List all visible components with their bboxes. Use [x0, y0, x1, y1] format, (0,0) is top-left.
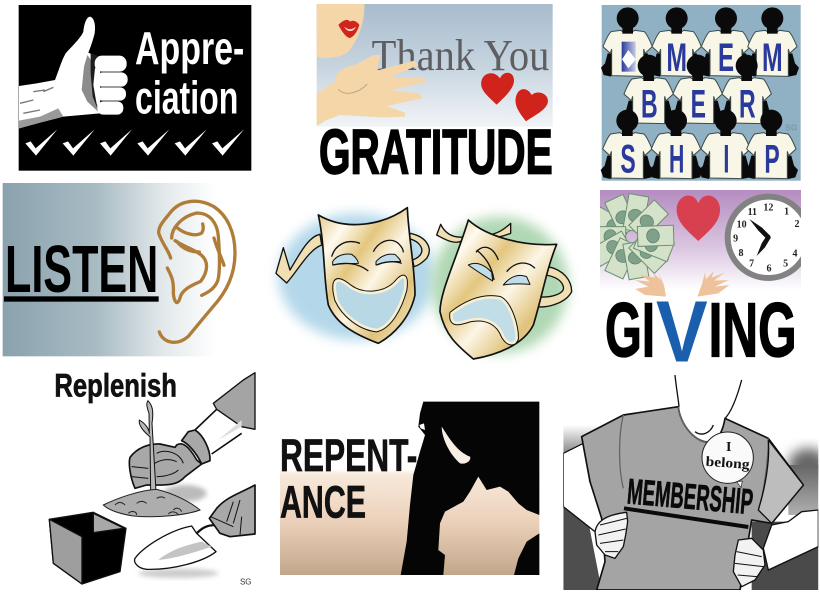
- icon: clock: 10: [737, 219, 747, 230]
- icon: clock: 2: [794, 219, 799, 230]
- icon: clock: 8: [738, 248, 743, 259]
- icon: face with lips: [317, 4, 364, 58]
- icon: left hand on hip: [595, 512, 628, 558]
- icon: clock: 7: [749, 259, 754, 270]
- underline: [4, 296, 159, 302]
- icon: six check marks: [25, 129, 244, 156]
- heading: GRATITUDE: GRATITUDE: [319, 117, 553, 187]
- background shading: [563, 405, 820, 590]
- icon: ear: [159, 201, 235, 342]
- panel: Repentance: [280, 402, 539, 575]
- badge: I belong: [702, 432, 753, 488]
- heading: Replenish: Replenish: [54, 368, 177, 404]
- bottom row of people: S: [620, 137, 636, 181]
- heading: ciation: ciation: [135, 71, 238, 123]
- middle row of people: [622, 55, 773, 127]
- icon: thumbs up hand: [19, 17, 128, 128]
- icon: gloved hand planting a seedling: [129, 373, 255, 502]
- panel: Gratitude: [317, 4, 553, 187]
- icon: mound of soil: [103, 489, 200, 517]
- icon: right hand on hip: [733, 538, 765, 587]
- heading: ANCE: ANCE: [280, 477, 366, 528]
- text: SG signature: SG: [785, 123, 798, 133]
- top row of people: [601, 7, 799, 80]
- background glow: [278, 213, 568, 353]
- icon: trowel with gloved hand: [135, 485, 255, 578]
- heading: REPENT-: REPENT-: [280, 430, 417, 481]
- icon: clock: 12: [763, 202, 773, 213]
- icon: wheel of money: [600, 193, 675, 280]
- icon: clock: 9: [733, 234, 738, 245]
- icon: clock: [728, 197, 809, 278]
- badge: I belong: I: [726, 440, 731, 455]
- text: SG signature: SG: [240, 577, 252, 586]
- panel: Listen: [3, 183, 240, 356]
- head and neck: [673, 375, 743, 434]
- panel: Replenish: [49, 368, 255, 586]
- icon: open hand: [317, 55, 426, 126]
- icon: tragedy mask: [437, 220, 572, 359]
- icon: comedy mask: [276, 208, 429, 343]
- panel: Comedy and tragedy masks: [276, 208, 572, 359]
- icon: reaching hands: [635, 271, 729, 297]
- icon: clock: 5: [783, 259, 788, 270]
- middle row of people: B: [641, 83, 658, 127]
- icon: bowed figure silhouette: [401, 402, 539, 575]
- text: Thank You: Thank You: [372, 31, 549, 80]
- arms: [563, 443, 818, 570]
- icon: clock: 11: [748, 207, 757, 218]
- bottom row of people: P: [764, 137, 780, 181]
- grey T-shirt: [582, 375, 803, 590]
- heading: Appre-: Appre-: [135, 22, 244, 74]
- heading: GI: GI: [605, 288, 655, 374]
- middle row of people: E: [691, 83, 706, 127]
- heading: LISTEN: LISTEN: [5, 233, 158, 307]
- bottom row of people: I: [723, 137, 729, 181]
- panel: Membership shirt: [563, 375, 820, 590]
- top row of people: E: [718, 36, 734, 80]
- heading: V in blue: V: [656, 283, 708, 381]
- icon: two red hearts: [481, 73, 548, 121]
- badge: I belong: belong: [705, 455, 750, 473]
- icon: clock: 4: [792, 248, 797, 259]
- icon: clock: 6: [766, 264, 771, 275]
- panel: Giving: [600, 190, 801, 362]
- panel: Appreciation: [19, 5, 251, 171]
- icon: black plant pot: [49, 512, 126, 584]
- icon: red heart: [677, 195, 720, 241]
- bottom row of people: [601, 110, 798, 181]
- icon: clock: 1: [784, 207, 789, 218]
- top row of people: M: [666, 36, 687, 80]
- bottom row of people: H: [669, 137, 684, 181]
- top row of people: M: [762, 36, 783, 80]
- panel: Membership crowd: [601, 5, 801, 181]
- underline: [624, 508, 748, 527]
- middle row of people: R: [739, 83, 756, 127]
